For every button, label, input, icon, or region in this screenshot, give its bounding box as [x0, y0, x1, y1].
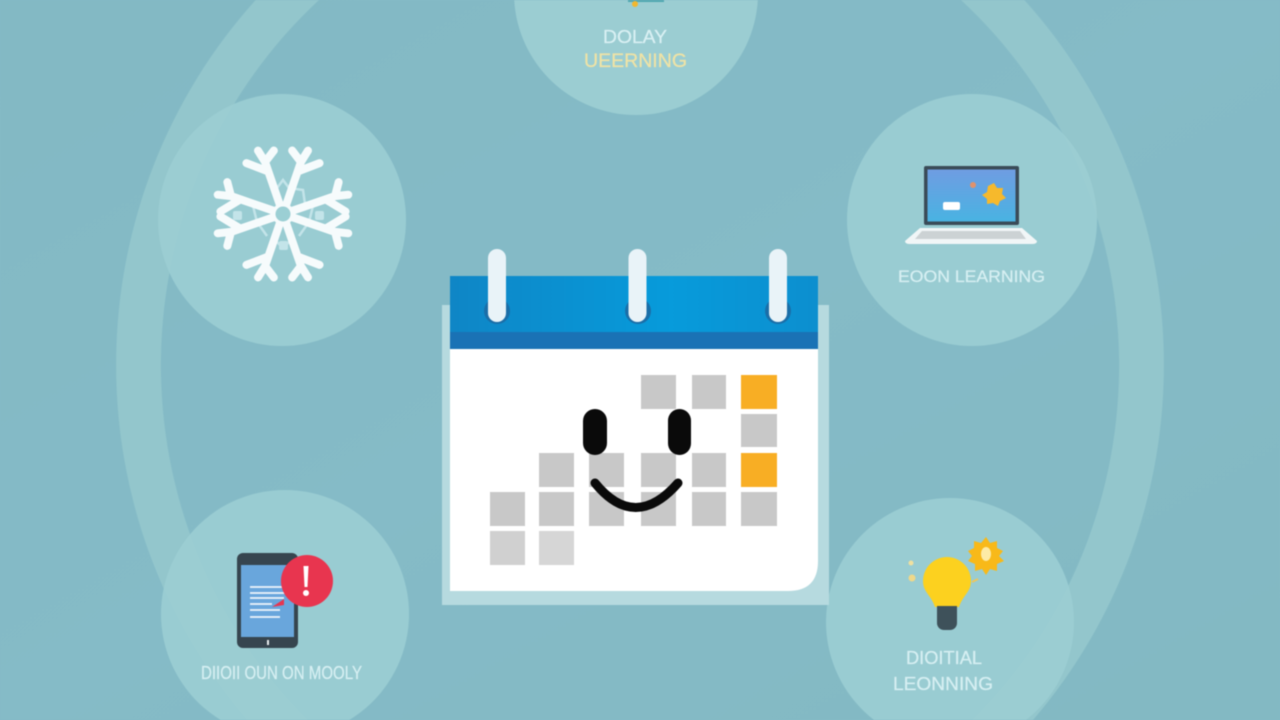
panel: daily learning: [514, 0, 758, 115]
label: digital line two: LEONNING: [893, 674, 993, 694]
icon: snowflake: [213, 146, 353, 282]
panel: digital learning: [826, 498, 1074, 720]
label: daily learning line two: UEERNING: [584, 51, 687, 72]
icon: light bulb and sun: [908, 537, 1004, 630]
icon: cropped daily learning icon: [628, 0, 664, 7]
label: e-learning: EOON LEARNING: [898, 267, 1045, 286]
calendar: [442, 249, 829, 605]
label: daily learning line one: DOLAY: [603, 27, 667, 47]
calendar back sheet: [442, 305, 829, 605]
calendar day grid: [490, 375, 777, 565]
panel: online study alert: [161, 490, 409, 720]
icon: tablet with alert: [237, 553, 333, 648]
calendar binder rings: [484, 249, 791, 324]
smiley face: [583, 409, 691, 508]
icon: laptop: [905, 166, 1037, 244]
calendar header: [450, 276, 818, 349]
panel: snow day: [158, 94, 406, 346]
calendar page: [450, 349, 818, 591]
label: online study: DIIOII OUN ON MOOLY: [201, 663, 362, 683]
label: digital line one: DIOITIAL: [906, 648, 982, 668]
panel: e-learning: [847, 94, 1097, 346]
